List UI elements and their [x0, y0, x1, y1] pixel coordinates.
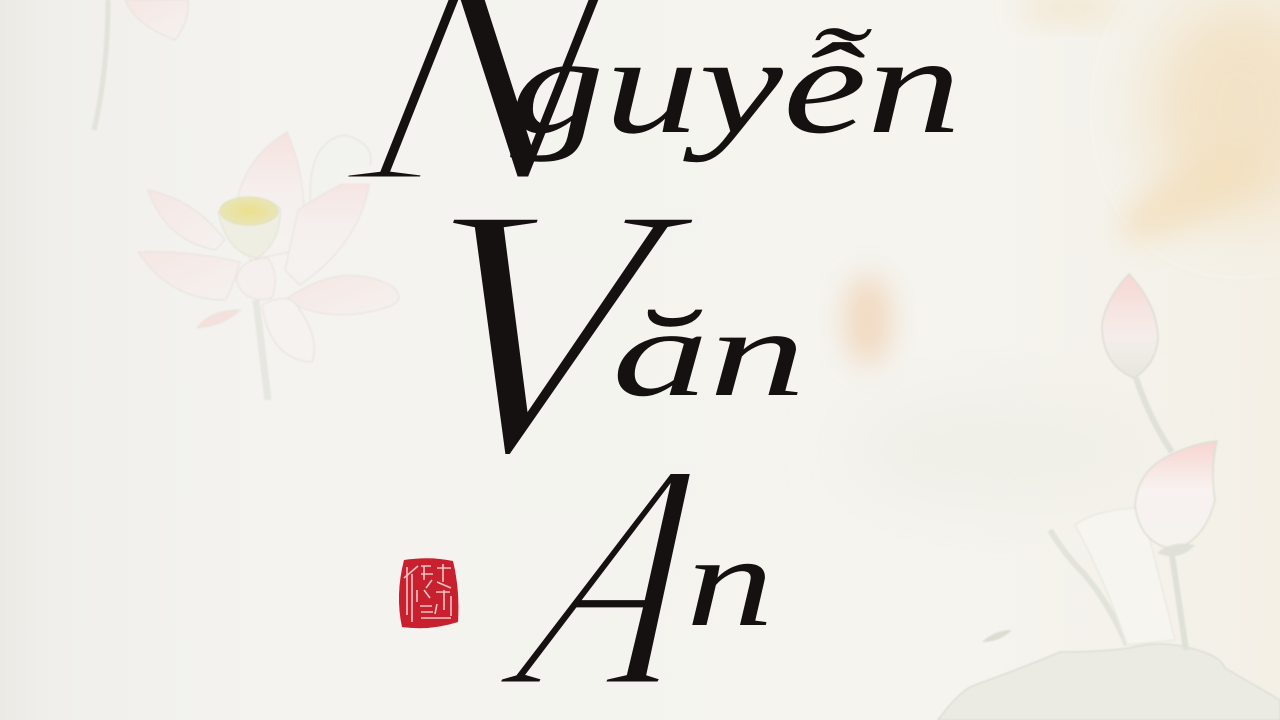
lotus remnant top left: [94, 0, 188, 130]
name: An: n: [686, 510, 774, 654]
red seal stamp: [399, 558, 458, 628]
name: Văn: V: [397, 132, 710, 531]
lotus flower left: [138, 132, 399, 400]
name: Nguyễn: guyễn: [510, 7, 961, 162]
name: Văn: ăn: [612, 285, 806, 423]
name: Văn: [397, 132, 806, 531]
lotus buds right: [938, 274, 1280, 720]
name: Nguyễn: [328, 0, 961, 243]
watercolour stains: [844, 0, 1280, 510]
leaf at bottom: [938, 644, 1280, 720]
